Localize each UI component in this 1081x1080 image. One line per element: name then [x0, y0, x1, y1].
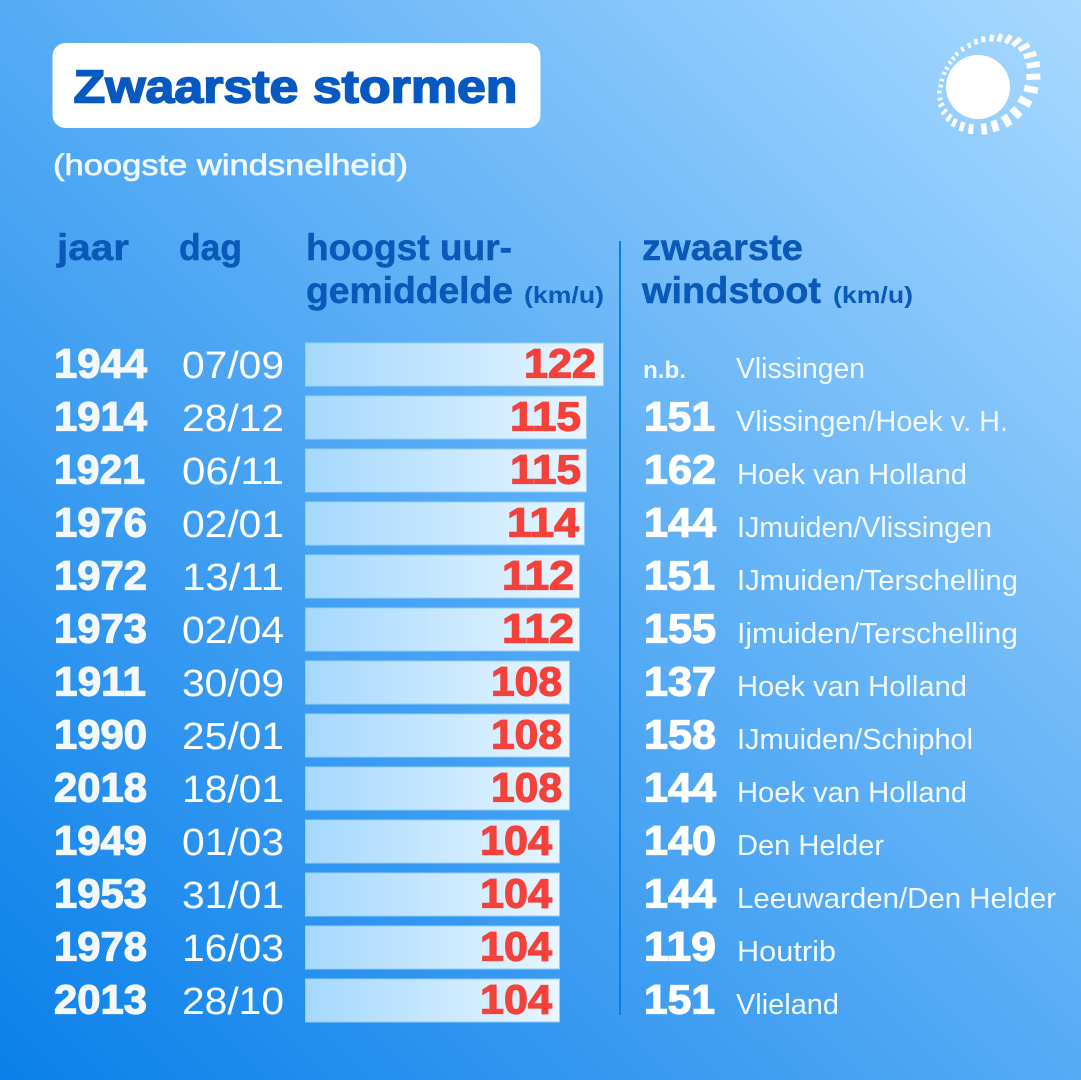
row 2018: Hoek van Holland [737, 777, 967, 809]
row 1914: 1914 [54, 394, 147, 440]
row 2013: Vlieland [736, 989, 839, 1021]
row 1990: IJmuiden/Schiphol [737, 724, 973, 756]
row 1914: 151 [644, 394, 715, 440]
row 1972: 112 [502, 552, 574, 598]
row 1973: Ijmuiden/Terschelling [737, 618, 1018, 650]
row 1972: 13/11 [182, 557, 284, 599]
row 1972: IJmuiden/Terschelling [737, 565, 1018, 597]
row 1978: Houtrib [737, 936, 836, 968]
title [52, 43, 540, 128]
row 1990: 158 [644, 712, 716, 758]
row 1921 [54, 446, 967, 493]
row 1953: Leeuwarden/Den Helder [737, 883, 1056, 915]
row 1911: Hoek van Holland [737, 671, 967, 703]
row 1973: 112 [502, 606, 574, 652]
column header: zwaarste windstoot: (km/u) [833, 282, 913, 308]
icon: sun [937, 33, 1040, 135]
row 1973: 02/04 [182, 610, 284, 652]
title: Zwaarste stormen [74, 60, 518, 112]
column header: hoogst uurgemiddelde: hoogst uur- [306, 227, 512, 268]
row 1978 [54, 924, 836, 970]
row 1921: 1921 [54, 446, 145, 492]
row 1911: 30/09 [182, 663, 284, 705]
row 1990 [54, 712, 973, 758]
column header: hoogst uurgemiddelde: gemiddelde [306, 270, 513, 311]
row 1976 [54, 500, 992, 546]
row 1953: 31/01 [182, 875, 284, 917]
row 1978: 1978 [54, 924, 147, 970]
row 1921: 115 [510, 446, 581, 492]
row 2018 [54, 764, 967, 811]
row 1976: 114 [507, 500, 579, 546]
row 1914: Vlissingen/Hoek v. H. [736, 406, 1008, 438]
row 2018: 2018 [54, 764, 147, 810]
row 1914: 28/12 [182, 398, 284, 440]
row 1944: 07/09 [182, 345, 284, 387]
row 1944: Vlissingen [736, 353, 865, 385]
row 1976: 144 [644, 500, 716, 546]
row 1953: 144 [644, 870, 716, 916]
column header: jaar: jaar [56, 227, 129, 268]
row 2013: 28/10 [182, 981, 284, 1023]
row 1944 [54, 340, 865, 387]
column header: hoogst uurgemiddelde: (km/u) [524, 282, 604, 308]
row 1914: 115 [510, 394, 581, 440]
row 1973: 155 [644, 606, 716, 652]
column header: dag: dag [179, 227, 242, 268]
row 1978: 16/03 [182, 928, 284, 970]
column header: zwaarste windstoot: zwaarste [642, 227, 803, 268]
row 1978: 104 [480, 924, 552, 970]
row 2013 [54, 976, 839, 1023]
row 1949: 140 [644, 818, 716, 864]
row 1949 [54, 818, 884, 864]
row 1921: Hoek van Holland [737, 459, 967, 491]
row 1990: 1990 [54, 712, 147, 758]
row 1973 [54, 606, 1018, 652]
row 1949: 1949 [54, 818, 147, 864]
row 1976: IJmuiden/Vlissingen [737, 512, 992, 544]
row 1911: 1911 [54, 658, 146, 704]
row 1953: 1953 [54, 870, 147, 916]
row 2013: 104 [480, 976, 552, 1022]
row 2018: 108 [491, 764, 562, 810]
row 1973: 1973 [54, 606, 147, 652]
row 1911 [54, 658, 967, 705]
row 1976: 1976 [54, 500, 147, 546]
row 2013: 2013 [54, 976, 147, 1022]
row 1944: 122 [524, 340, 596, 386]
row 1911: 108 [491, 658, 562, 704]
row 1990: 25/01 [182, 716, 284, 758]
row 2018: 18/01 [182, 769, 284, 811]
row 1949: 104 [480, 818, 552, 864]
row 1944: n.b. [643, 357, 686, 384]
column header: zwaarste windstoot: windstoot [641, 270, 821, 311]
column header: zwaarste windstoot [641, 227, 913, 311]
row 1914 [54, 394, 1008, 440]
row 1972: 151 [644, 552, 715, 598]
subtitle: (hoogste windsnelheid) [53, 149, 408, 182]
column header: hoogst uurgemiddelde [306, 227, 604, 311]
row 1972: 1972 [54, 552, 147, 598]
row 1978: 119 [644, 924, 716, 970]
row 1972 [54, 552, 1018, 599]
row 1990: 108 [491, 712, 562, 758]
row 1921: 162 [644, 446, 716, 492]
row 1949: Den Helder [737, 830, 884, 862]
row 1921: 06/11 [182, 451, 284, 493]
row 1944: 1944 [54, 340, 147, 386]
row 1976: 02/01 [182, 504, 284, 546]
row 2013: 151 [644, 976, 715, 1022]
row 1953 [54, 870, 1056, 917]
column divider [619, 241, 621, 1015]
row 1911: 137 [644, 658, 716, 704]
row 1949: 01/03 [182, 822, 284, 864]
row 2018: 144 [644, 764, 716, 810]
row 1953: 104 [480, 870, 552, 916]
